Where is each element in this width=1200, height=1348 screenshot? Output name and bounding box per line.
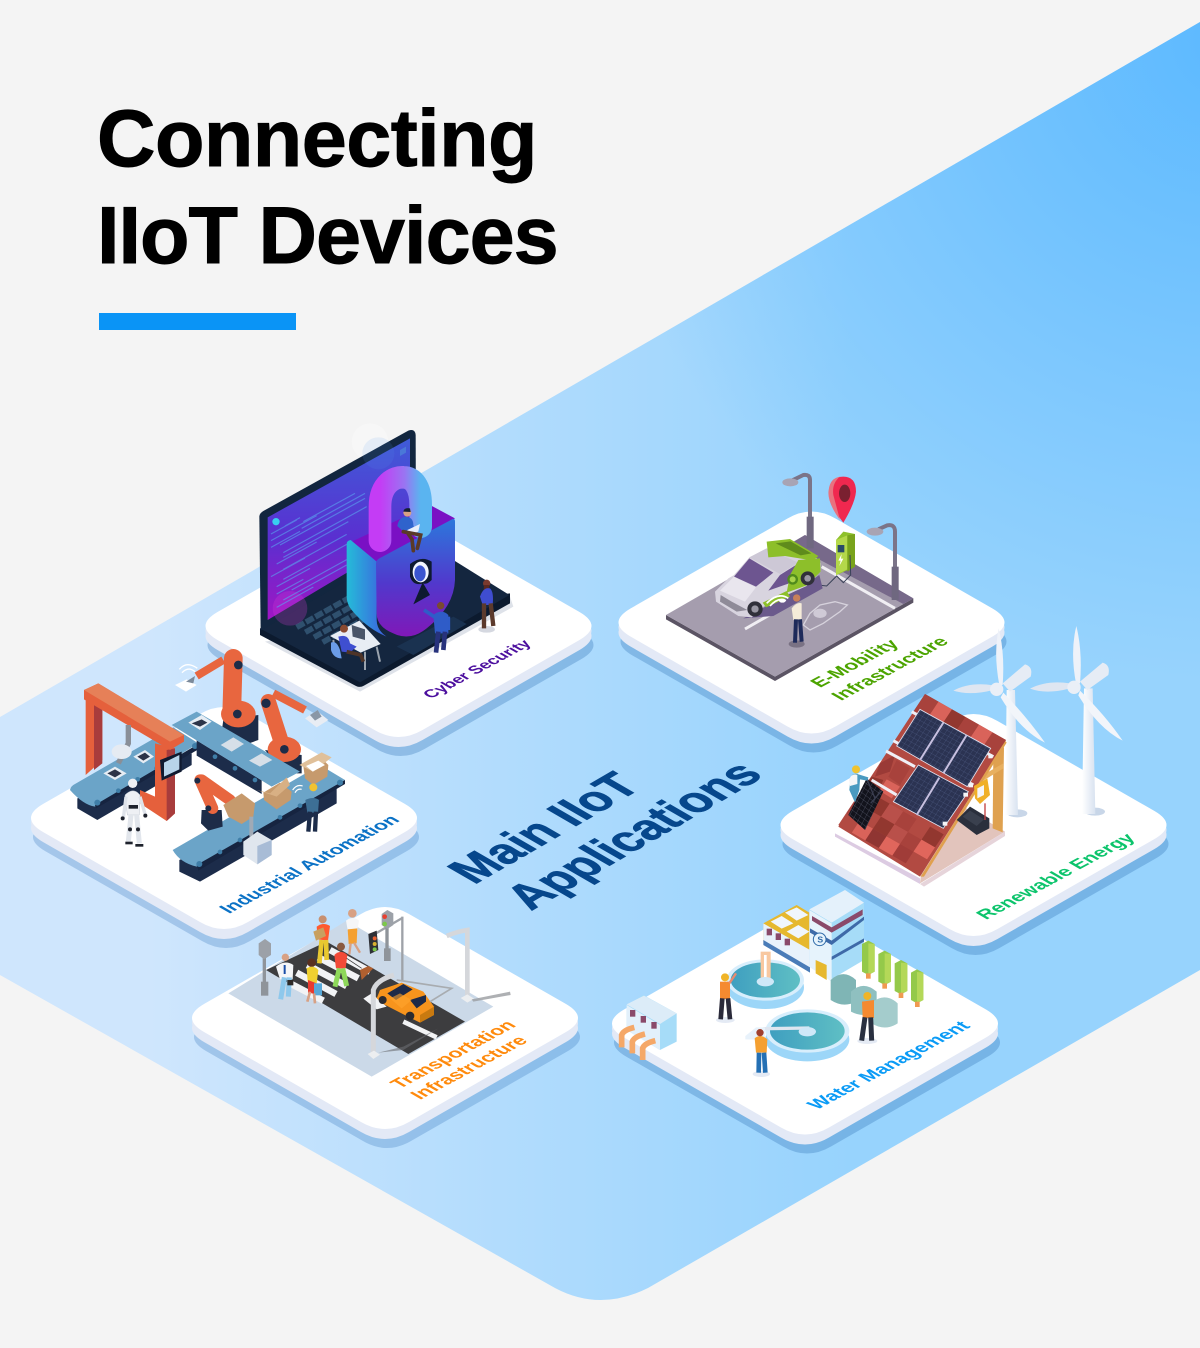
laptop with padlock illustration (259, 423, 513, 692)
car (715, 539, 823, 618)
platform (780, 714, 1168, 955)
tanks (831, 974, 898, 1027)
panel: industrial automation (31, 658, 419, 948)
wind turbines (953, 626, 1123, 817)
water treatment plant illustration (622, 890, 923, 1077)
title: Connecting (97, 94, 537, 184)
label: infrastructure: Infrastructure (827, 634, 954, 704)
platform (618, 512, 1006, 752)
platform (31, 707, 419, 948)
traffic lights (259, 910, 402, 996)
label: infrastructure: Infrastructure (406, 1033, 533, 1103)
robot arm right (261, 693, 328, 773)
robot arm top (175, 658, 258, 746)
label: e-mobility: E-Mobility (806, 637, 905, 691)
label: industrial automation: Industrial Automation (215, 813, 405, 917)
workers (716, 973, 877, 1077)
factory conveyor and robots illustration (70, 658, 345, 882)
platform (192, 907, 580, 1148)
label: renewable energy: Renewable Energy (972, 831, 1141, 923)
title accent bar (99, 313, 296, 330)
settling pool two (745, 1009, 849, 1061)
crosswalk street illustration (228, 909, 511, 1077)
roof tiles (838, 694, 1006, 872)
panel: renewable energy (780, 626, 1168, 955)
worker and white robot (121, 779, 319, 847)
label: transportation: Transportation (386, 1018, 521, 1092)
gantry frame (84, 683, 184, 821)
panel: transportation infrastructure (192, 907, 580, 1148)
central heading: applications: Applications (493, 754, 775, 917)
diagonal conveyor (172, 712, 300, 794)
green filters (862, 941, 923, 1007)
panel: cyber security (206, 423, 594, 756)
pump house and pipes (622, 995, 677, 1060)
central heading: main iiot: Main IIoT (436, 765, 653, 891)
car (377, 983, 434, 1023)
lamp post and charger (782, 475, 899, 600)
lower conveyor (173, 752, 345, 882)
solar roof illustration (835, 694, 1007, 887)
left conveyor (70, 727, 198, 820)
platform (612, 912, 1000, 1154)
label: water management: Water Management (803, 1018, 976, 1113)
label: cyber security: Cyber Security (419, 637, 536, 701)
street lamps (368, 930, 511, 1059)
panel: e-mobility infrastructure (618, 475, 1006, 752)
title second line: IIoT Devices (97, 191, 558, 281)
main building (763, 890, 864, 982)
panel: water management (612, 890, 1000, 1154)
settling pool one (727, 952, 804, 1009)
platform (206, 515, 594, 756)
parking car icon and person (789, 594, 847, 648)
main building: S (817, 935, 823, 945)
electric car charging illustration (666, 475, 913, 681)
pedestrians (276, 909, 373, 1003)
